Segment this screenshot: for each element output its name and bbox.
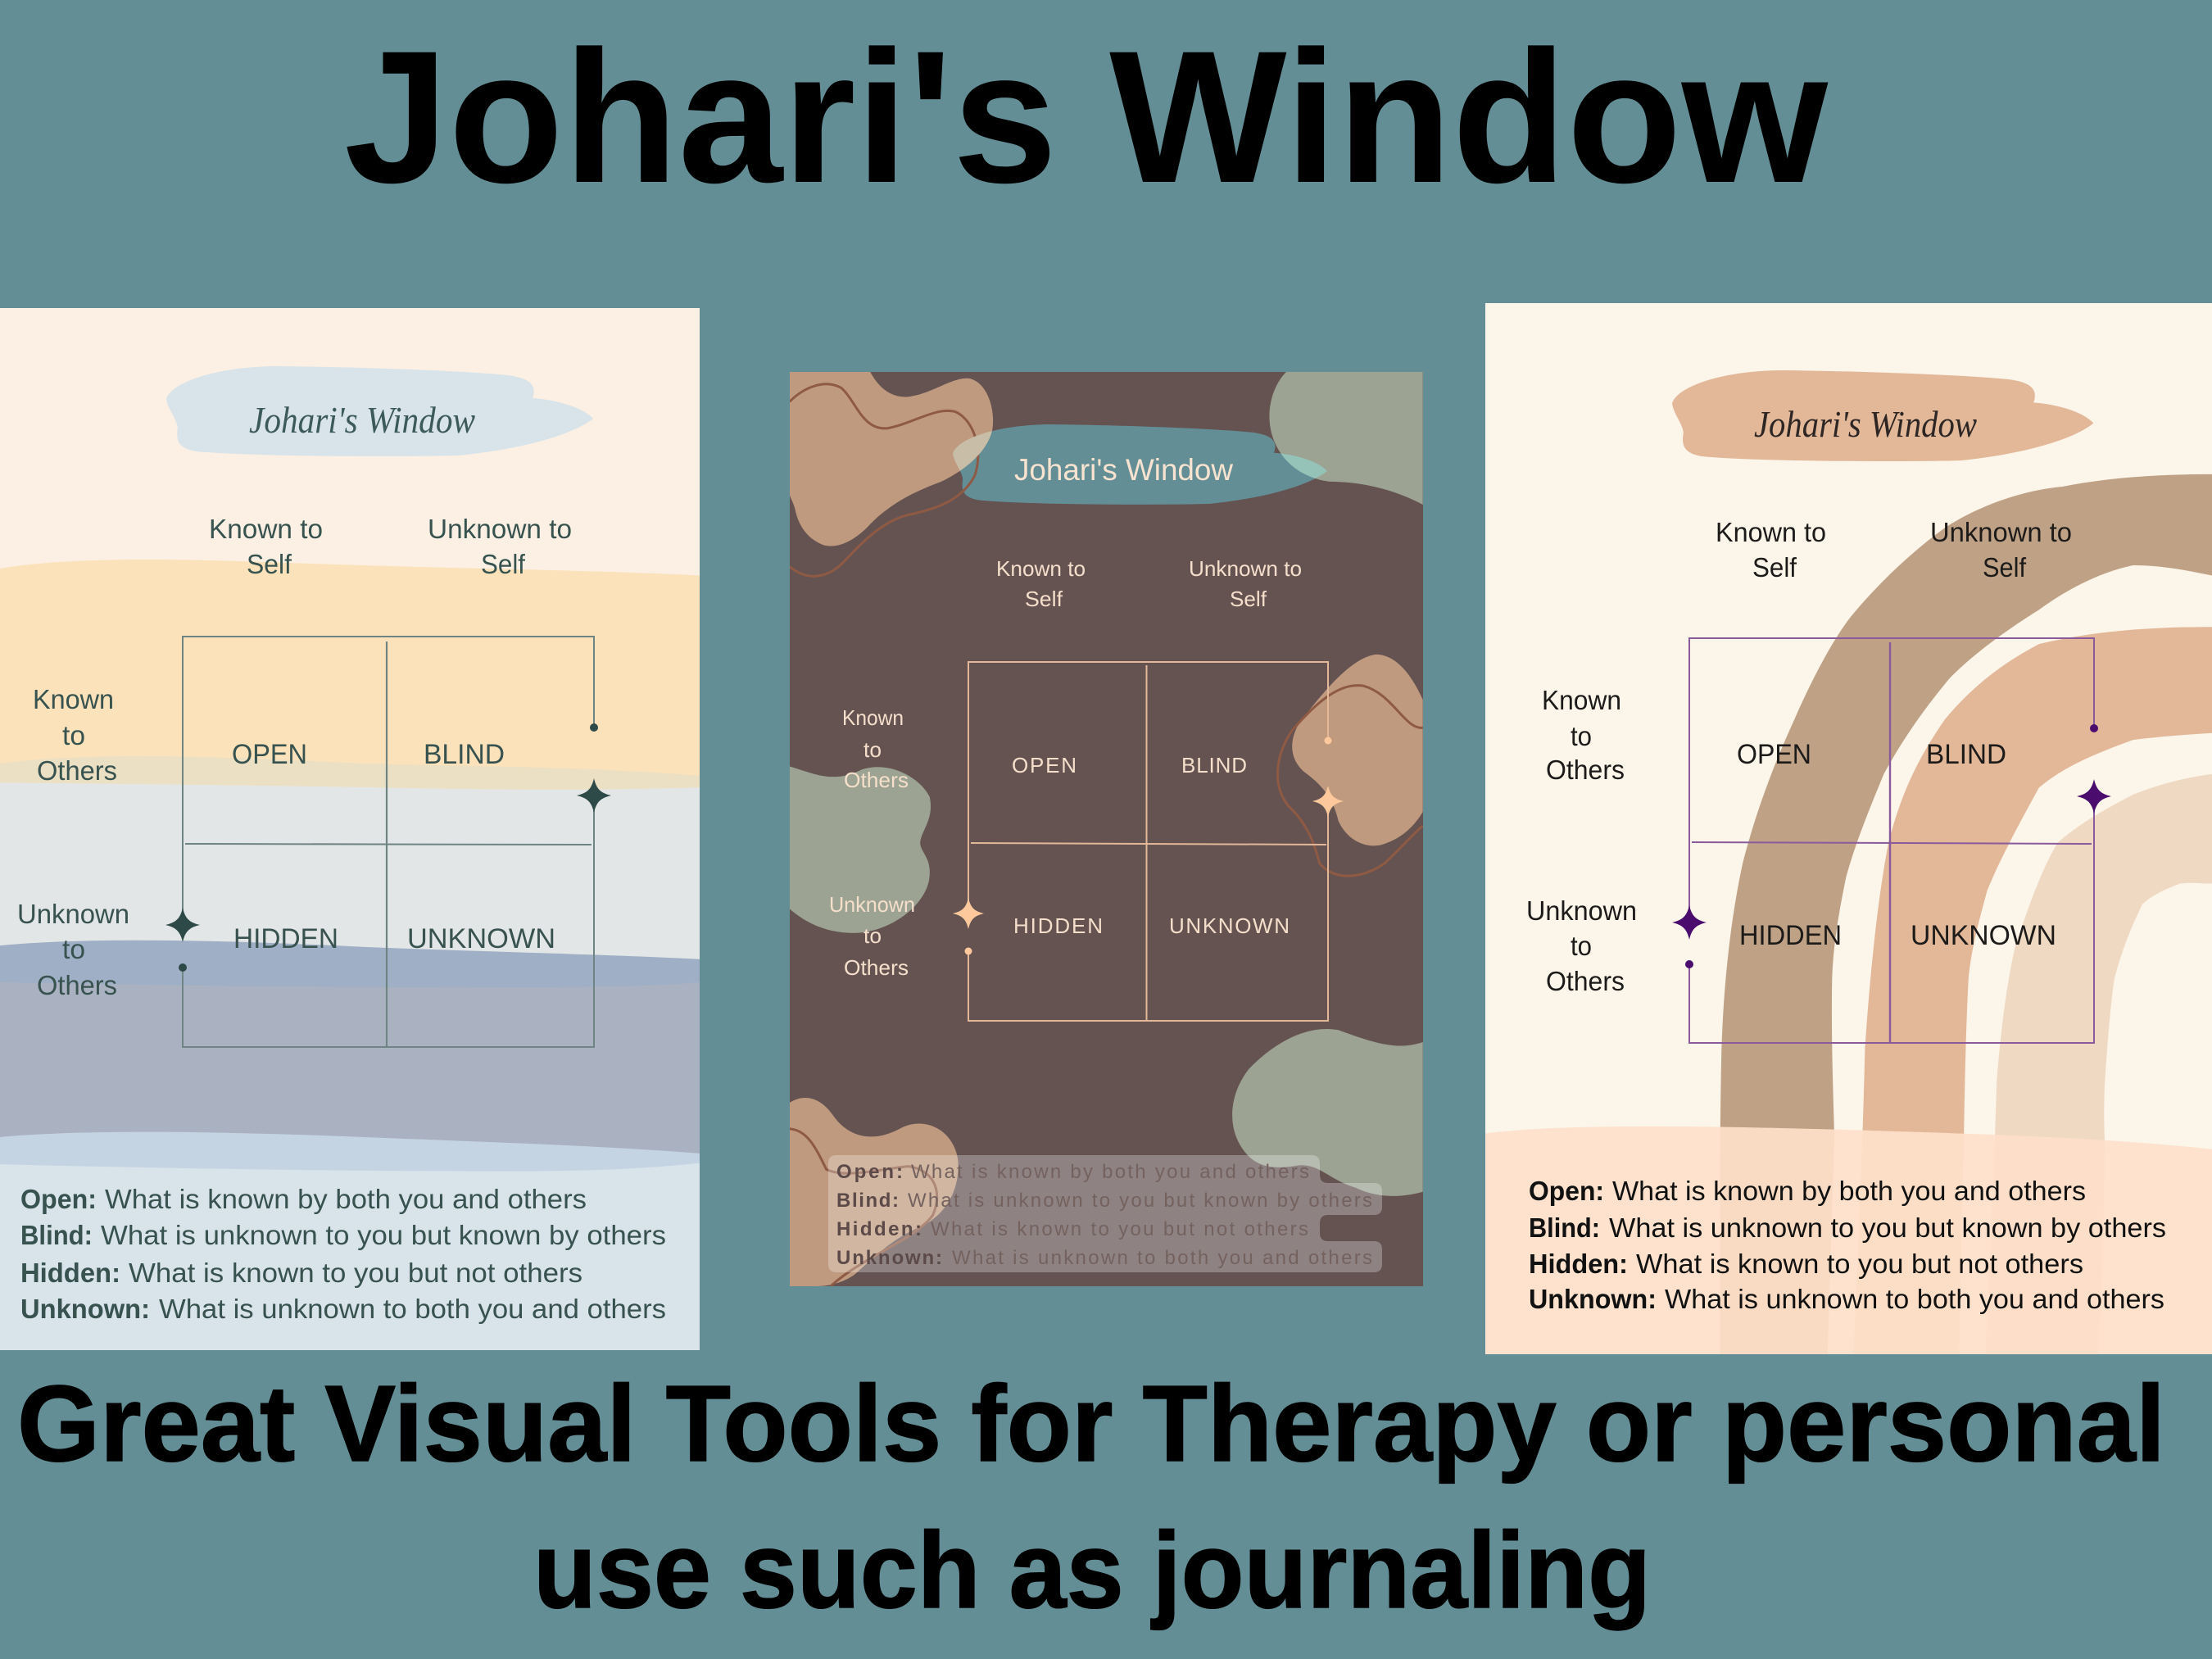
row headers: to — [863, 737, 882, 762]
title brush stroke — [166, 366, 593, 456]
quadrant labels — [1012, 753, 1290, 938]
column headers: Known to — [996, 556, 1086, 581]
legend definitions: What is known to you but not others — [129, 1258, 582, 1288]
legend definitions — [836, 1161, 1372, 1269]
legend definitions: Open: — [20, 1184, 97, 1214]
quadrant labels: UNKNOWN — [1911, 920, 2056, 951]
panel: brown and sage version — [790, 372, 1423, 1286]
legend definitions: What is known to you but not others — [931, 1218, 1308, 1240]
column headers — [211, 519, 571, 573]
column headers — [1717, 522, 2071, 577]
quadrant labels: HIDDEN — [1013, 913, 1103, 938]
title: Johari's Window — [344, 11, 1829, 222]
column headers: Self — [247, 549, 292, 579]
legend definitions: Blind: — [836, 1190, 899, 1212]
quadrant labels: BLIND — [424, 739, 505, 770]
column headers: Self — [481, 549, 526, 579]
column headers — [998, 560, 1301, 606]
legend definitions: What is known by both you and others — [911, 1161, 1309, 1183]
legend definitions: What is known to you but not others — [1636, 1249, 2083, 1279]
row headers: to — [1571, 721, 1592, 751]
title brush stroke — [953, 424, 1327, 505]
row headers: Others — [844, 768, 909, 792]
legend definitions — [20, 1184, 666, 1324]
subtitle: use such as journaling — [533, 1510, 1651, 1630]
row headers: Known — [33, 684, 114, 714]
legend definitions: Hidden: — [1529, 1249, 1628, 1279]
legend backing shapes — [828, 1155, 1382, 1272]
legend definitions: Unknown: — [836, 1247, 942, 1269]
row headers: Others — [844, 955, 909, 980]
quadrant labels: HIDDEN — [1739, 920, 1842, 951]
legend definitions: What is unknown to you but known by others — [1609, 1213, 2166, 1243]
legend definitions: What is unknown to you but known by others — [101, 1220, 666, 1250]
row headers: to — [863, 923, 882, 948]
legend definitions — [1529, 1176, 2166, 1314]
row headers — [1526, 685, 1637, 996]
column headers: Unknown to — [1189, 556, 1302, 581]
column headers: Self — [1983, 552, 2027, 582]
window grid — [165, 637, 611, 1047]
subtitle — [17, 1363, 2165, 1630]
legend definitions: What is unknown to both you and others — [1665, 1284, 2164, 1314]
quadrant labels: OPEN — [232, 739, 307, 770]
row headers: Unknown — [17, 899, 129, 929]
legend definitions: What is unknown to both you and others — [952, 1247, 1372, 1269]
row headers — [17, 684, 129, 1000]
row headers: to — [1571, 931, 1592, 961]
panel: pastel blue and yellow version — [0, 308, 700, 1354]
row headers: Known — [1542, 685, 1621, 715]
legend definitions: Blind: — [1529, 1213, 1600, 1243]
legend definitions: Open: — [1529, 1176, 1604, 1206]
column headers: Known to — [1716, 517, 1826, 547]
window grid — [953, 662, 1344, 1021]
column headers: Unknown to — [1930, 517, 2072, 547]
legend definitions: Hidden: — [836, 1218, 922, 1240]
subtitle: Great Visual Tools for Therapy or personal — [17, 1363, 2165, 1484]
legend definitions: Open: — [836, 1161, 903, 1183]
title brush stroke — [1672, 370, 2093, 461]
brush and blob overlaps — [953, 431, 1327, 478]
column headers: Self — [1752, 552, 1797, 582]
legend definitions: What is known by both you and others — [105, 1184, 587, 1214]
legend definitions: Unknown: — [1529, 1284, 1657, 1314]
legend definitions: Blind: — [20, 1220, 93, 1250]
quadrant labels: BLIND — [1181, 753, 1247, 777]
bottom wash band — [1485, 1126, 2212, 1362]
panel title: Johari's Window — [1014, 453, 1233, 487]
column headers: Known to — [209, 514, 323, 544]
legend definitions: What is unknown to both you and others — [159, 1294, 666, 1324]
row headers: Others — [1546, 755, 1625, 785]
row headers: Unknown — [1526, 895, 1637, 926]
row headers: Others — [37, 970, 117, 1000]
legend definitions: What is unknown to you but known by others — [908, 1190, 1372, 1212]
column headers: Self — [1230, 587, 1267, 611]
quadrant labels: HIDDEN — [233, 923, 338, 954]
quadrant labels: OPEN — [1012, 753, 1077, 777]
legend definitions: What is known by both you and others — [1612, 1176, 2086, 1206]
quadrant labels: OPEN — [1737, 739, 1811, 770]
legend definitions: Unknown: — [20, 1294, 150, 1324]
row headers: Known — [842, 705, 904, 730]
row headers — [829, 705, 915, 980]
panel: cream and terracotta rainbow version — [1485, 303, 2212, 1362]
row headers: Unknown — [829, 892, 915, 917]
quadrant labels — [232, 739, 555, 954]
organic blobs — [790, 372, 1423, 1286]
panel title: Johari's Window — [249, 399, 475, 441]
quadrant labels: UNKNOWN — [407, 923, 555, 954]
rainbow arches — [1485, 474, 2212, 1362]
quadrant labels: BLIND — [1926, 739, 2006, 770]
window grid — [1672, 638, 2111, 1043]
panel title: Johari's Window — [1754, 403, 1977, 445]
quadrant labels: UNKNOWN — [1169, 913, 1290, 938]
column headers: Self — [1025, 587, 1063, 611]
legend definitions: Hidden: — [20, 1258, 120, 1288]
row headers: Others — [37, 755, 117, 786]
row headers: to — [62, 934, 85, 964]
quadrant labels — [1737, 739, 2056, 951]
row headers: to — [62, 720, 85, 750]
background wash bands — [0, 560, 700, 1354]
column headers: Unknown to — [428, 514, 572, 544]
row headers: Others — [1546, 966, 1625, 996]
